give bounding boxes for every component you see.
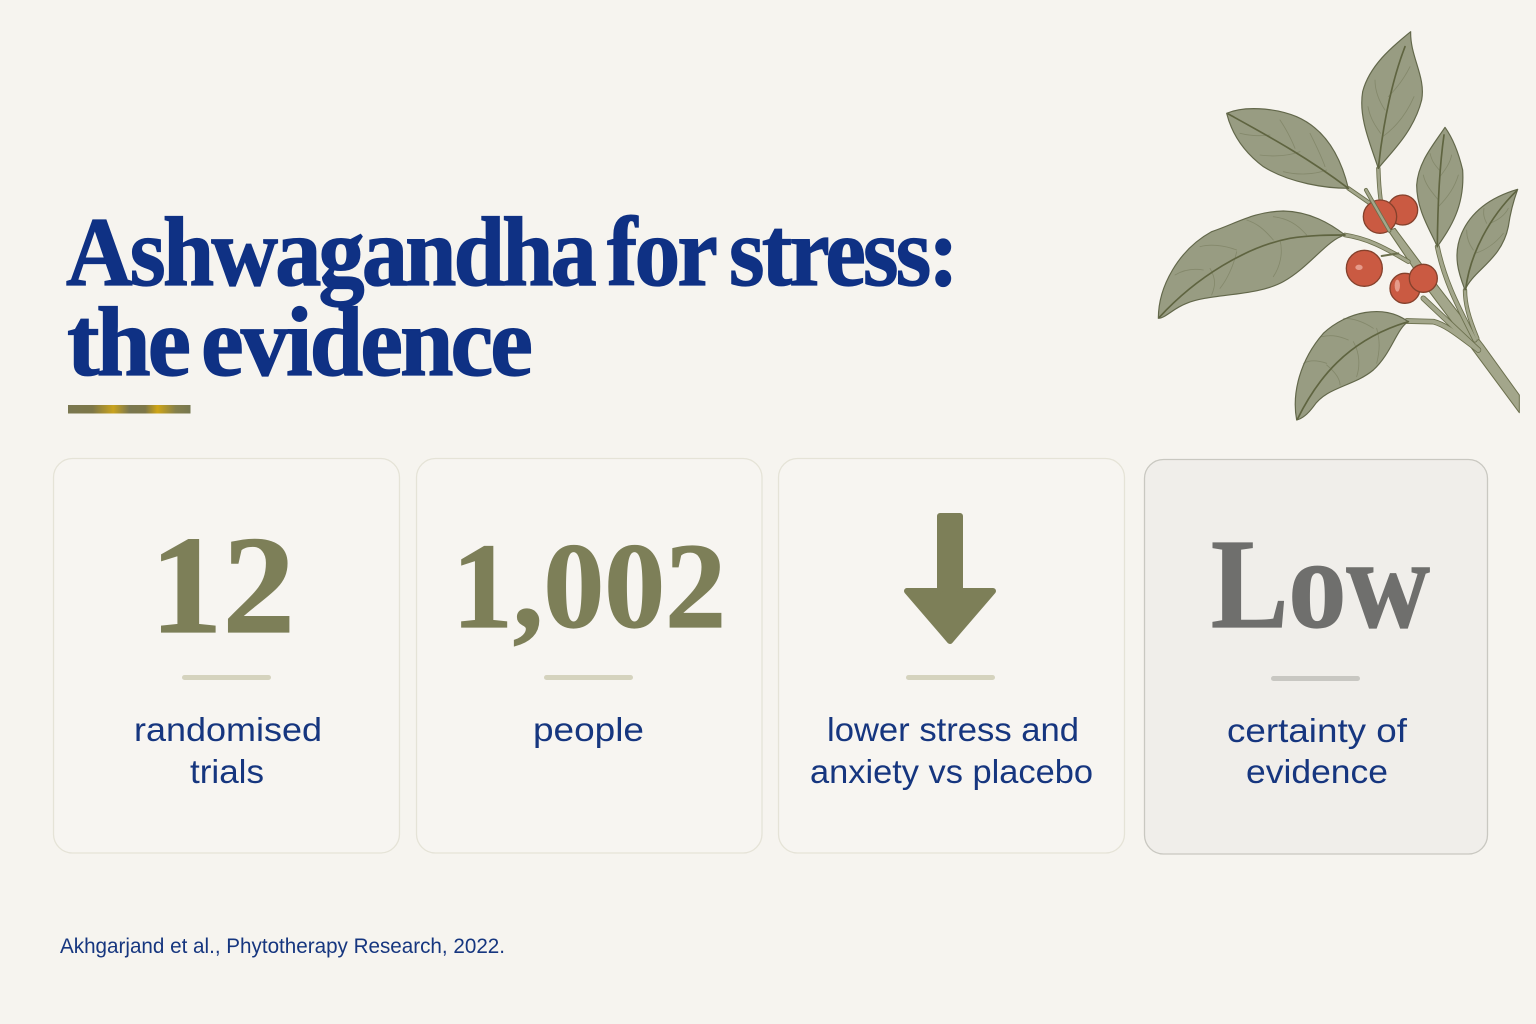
title: the [67, 288, 189, 397]
divider [182, 675, 271, 680]
label: certainty of evidence: evidence [1246, 753, 1388, 790]
berries [1346, 190, 1437, 303]
label: randomised trials: randomised [134, 711, 322, 748]
title [66, 198, 956, 397]
source citation: Akhgarjand et al., Phytotherapy Research, 2022. [60, 935, 505, 958]
stat: Low: Low [1211, 513, 1430, 655]
title: stress: [729, 198, 956, 307]
leaf: right [1457, 189, 1518, 290]
title: evidence [201, 288, 531, 397]
label: randomised trials [134, 711, 322, 790]
label: certainty of evidence: certainty of [1227, 712, 1408, 749]
divider [906, 675, 995, 680]
stat: 12: 12 [150, 508, 295, 663]
leaf: bottom [1295, 312, 1408, 420]
title: for [607, 198, 716, 307]
label: certainty of evidence [1227, 712, 1408, 790]
label: randomised trials: trials [190, 753, 264, 790]
title: Ashwagandha [66, 198, 595, 307]
panel: certainty of evidence [1144, 460, 1488, 854]
leaf: large left [1158, 211, 1345, 318]
label: lower stress and anxiety vs placebo: lower stress and [827, 711, 1079, 748]
panel: randomised trials [54, 458, 400, 853]
leaf: top [1362, 32, 1422, 168]
divider [544, 675, 633, 680]
label: people: people [533, 711, 644, 748]
illustration: ashwagandha sprig [1158, 32, 1519, 420]
label: lower stress and anxiety vs placebo: anxiety vs placebo [810, 753, 1093, 790]
leaf: centre right [1417, 127, 1463, 247]
panel: lower stress [778, 458, 1124, 853]
icon: down arrow [907, 516, 993, 641]
leaf: upper left [1227, 109, 1348, 188]
label: lower stress and anxiety vs placebo [810, 711, 1093, 790]
divider [1271, 676, 1360, 681]
stems [1345, 168, 1519, 413]
title accent bar [68, 405, 190, 414]
stat: 1,002: 1,002 [452, 519, 726, 654]
panel: people [416, 458, 762, 853]
